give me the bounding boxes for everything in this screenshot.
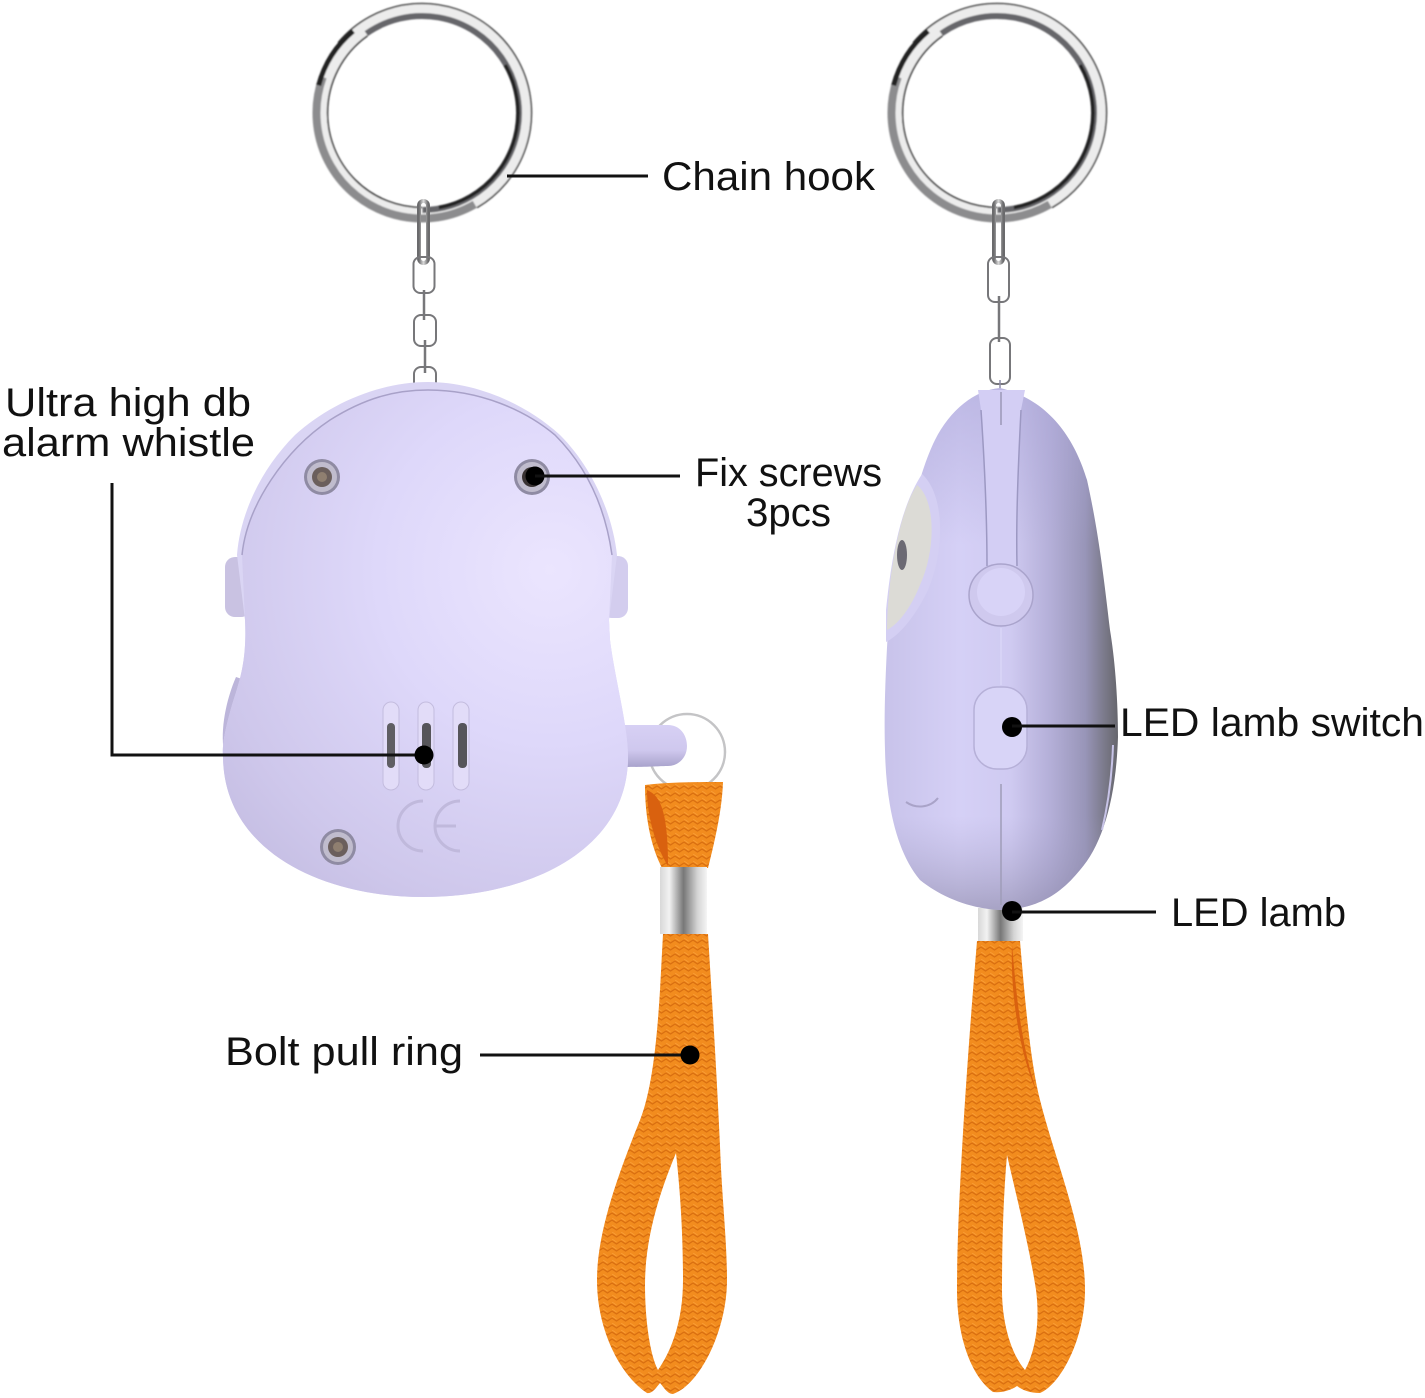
callout: LED lamb — [1002, 891, 1346, 935]
callout: bolt pull ring: Bolt pull ring — [225, 1030, 463, 1074]
edge highlight — [1102, 745, 1113, 830]
alarm body, side view — [885, 388, 1118, 910]
connecting chain, right — [988, 201, 1010, 425]
callout: bolt pull ring — [225, 1030, 700, 1074]
eye, side view — [886, 474, 940, 642]
callout: fix screws: Fix screws — [695, 451, 882, 495]
left keychain assembly — [223, 0, 727, 1394]
callout: fix screws — [526, 451, 882, 535]
chain hook ring, left — [268, 0, 576, 267]
screw: top right — [514, 459, 550, 495]
alarm body, back view — [223, 382, 628, 897]
LED switch button — [974, 687, 1027, 769]
callout: ultra high db alarm whistle: Ultra high db — [5, 381, 251, 425]
screw: top left — [304, 459, 340, 495]
screw: bottom — [320, 829, 356, 865]
callout: chain hook: Chain hook — [662, 155, 876, 199]
whistle vents — [383, 702, 469, 790]
callout: fix screws: 3pcs — [746, 491, 831, 535]
chain hook ring, right — [843, 0, 1151, 267]
callout: ultra high db alarm whistle: alarm whistle — [2, 421, 255, 465]
seam and smile detail — [906, 392, 1001, 905]
callout: LED lamb switch: LED lamb switch — [1120, 701, 1424, 745]
wrist strap, right — [957, 908, 1085, 1393]
callout: ultra high db alarm whistle — [2, 381, 434, 764]
callout: LED lamb: LED lamb — [1171, 891, 1346, 935]
CE mark — [398, 801, 460, 851]
peg and small split ring — [625, 714, 725, 790]
connecting chain, left — [414, 201, 436, 391]
wrist strap, left — [597, 782, 727, 1394]
right keychain assembly — [843, 0, 1151, 1393]
top strip and slider button — [969, 390, 1033, 626]
